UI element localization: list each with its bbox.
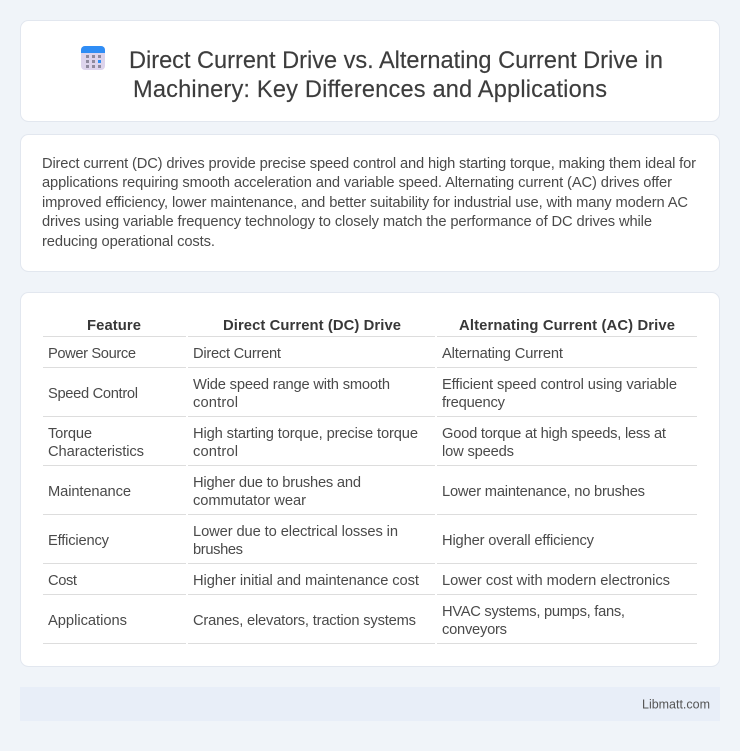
panel: comparison table [20,292,720,666]
row: maintenance: Maintenance [48,484,131,500]
row: speed control [43,377,697,416]
text block: intro paragraph: drives using variable frequency technology to closely match the performance of DC drives while [42,214,652,230]
row: torque characteristics: control [193,444,238,460]
row: speed control: Wide speed range with smooth [193,377,390,393]
text block: intro paragraph: applications requiring smooth acceleration and variable speed. Alternating current (AC) drives offer [42,175,672,191]
row: speed control: Speed Control [48,386,138,402]
text block: intro paragraph: reducing operational costs. [42,234,215,250]
row: power source [43,346,697,368]
row: maintenance [43,475,697,514]
footer [20,687,720,721]
row: torque characteristics: High starting torque, precise torque [193,426,418,442]
title [129,48,663,103]
row: applications: Cranes, elevators, traction systems [193,613,416,629]
table header row [43,318,697,336]
table header row: Alternating Current (AC) Drive [459,318,675,334]
row: power source: Alternating Current [442,346,563,362]
row: efficiency: Efficiency [48,533,110,549]
row: applications: Applications [48,613,127,629]
row: speed control: frequency [442,395,506,411]
footer: Libmatt.com [642,698,710,712]
row: torque characteristics: Good torque at high speeds, less at [442,426,666,442]
row: cost: Higher initial and maintenance cost [193,573,419,589]
panel: intro [20,134,720,272]
row: applications [43,604,697,644]
row: applications: conveyors [442,622,507,638]
row: torque characteristics: Characteristics [48,444,144,460]
row: cost [43,573,697,594]
row: efficiency [43,524,697,564]
row: efficiency: Higher overall efficiency [442,533,595,549]
table header row: Feature [87,318,141,334]
row: power source: Direct Current [193,346,281,362]
table header row: Direct Current (DC) Drive [223,318,401,334]
row: speed control: Efficient speed control using variable [442,377,677,393]
title: Machinery: Key Differences and Applications [133,77,607,103]
panel: header card [20,20,720,122]
row: torque characteristics: low speeds [442,444,514,460]
text block: intro paragraph: Direct current (DC) drives provide precise speed control and high starting torque, making them ideal for [42,156,696,172]
icon: calendar [81,46,105,70]
row: maintenance: Lower maintenance, no brushes [442,484,645,500]
row: efficiency: brushes [193,542,243,558]
row: power source: Power Source [48,346,136,362]
row: torque characteristics [43,426,697,466]
title: Direct Current Drive vs. Alternating Current Drive in [129,48,663,74]
row: maintenance: Higher due to brushes and [193,475,361,491]
row: efficiency: Lower due to electrical losses in [193,524,398,540]
text block: intro paragraph: improved efficiency, lower maintenance, and better suitability for industrial use, with many modern AC [42,195,688,211]
row: cost: Lower cost with modern electronics [442,573,670,589]
row: maintenance: commutator wear [193,493,306,509]
row: applications: HVAC systems, pumps, fans, [442,604,625,620]
row: torque characteristics: Torque [48,426,92,442]
row: speed control: control [193,395,238,411]
text block: intro paragraph [42,156,696,250]
row: cost: Cost [48,573,77,589]
